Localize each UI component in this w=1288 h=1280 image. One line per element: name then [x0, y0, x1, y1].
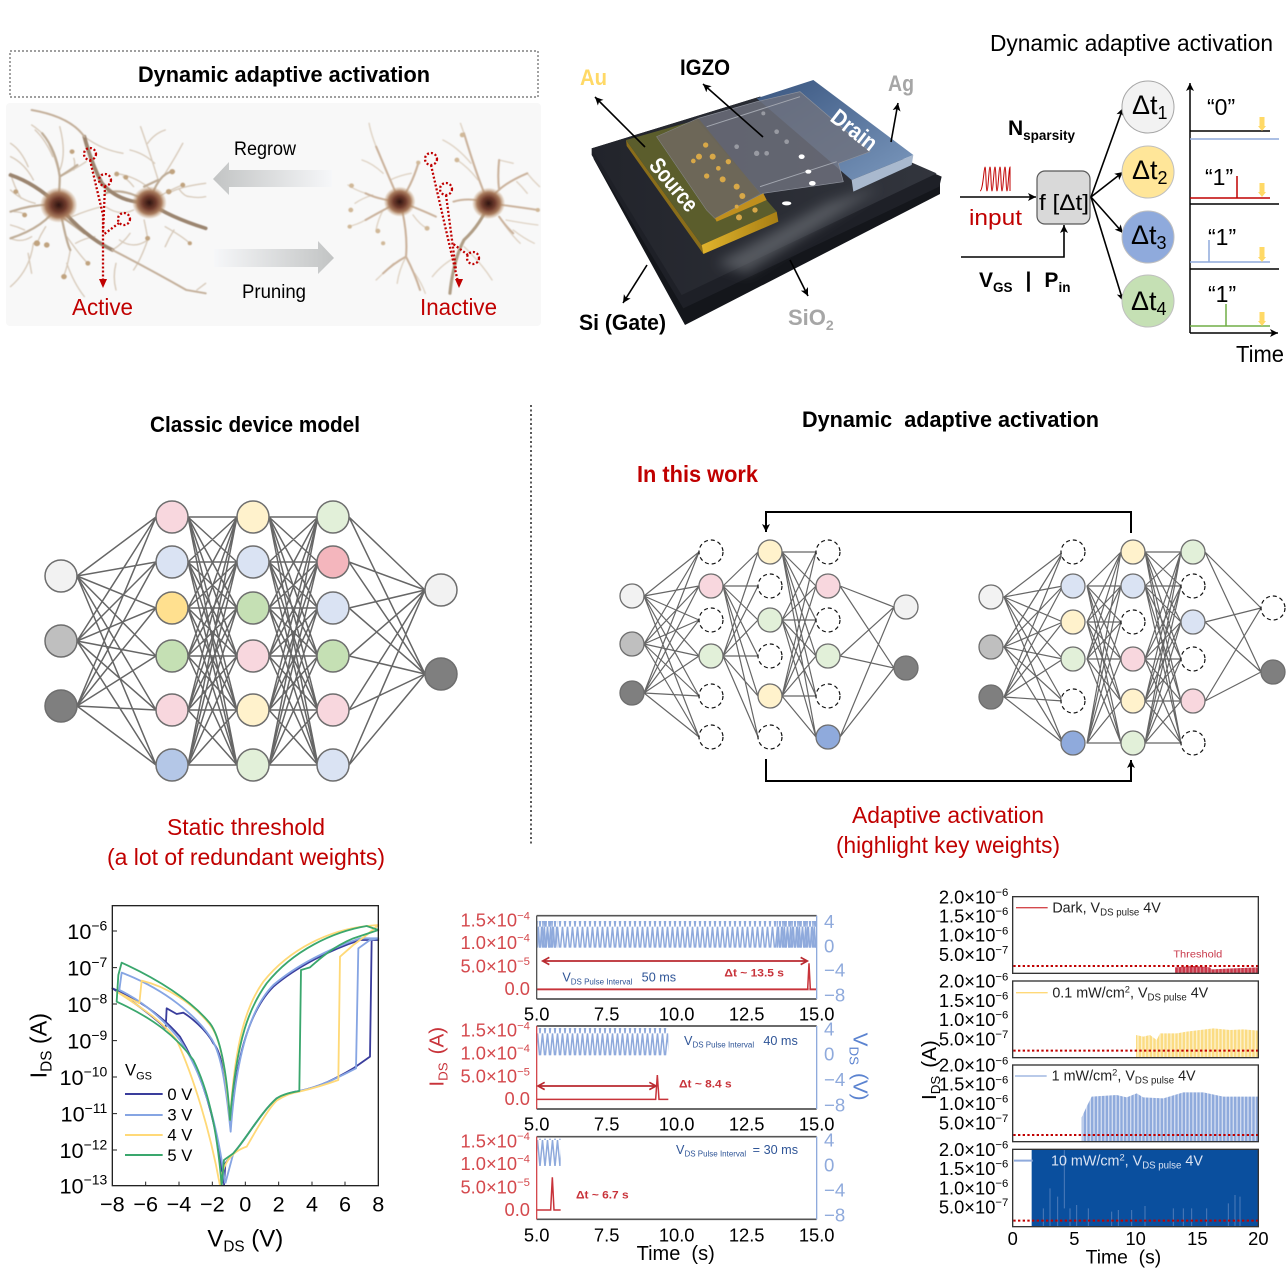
panel: 40 ms interval: 1.5×10: [460, 1020, 517, 1041]
panel: dark: Dark, V: [1052, 900, 1100, 916]
title box: Dynamic adaptive activation: Dynamic adaptive activation: [138, 62, 430, 87]
illustration: active neurons: [11, 110, 206, 297]
arrow: input: [960, 196, 1036, 198]
y tick labels: −6: [91, 917, 108, 933]
label: 1 first: “1”: [1205, 164, 1233, 190]
panel: 50 ms interval: 10.0: [659, 1004, 695, 1025]
panel: 50 ms interval: 0.0: [505, 978, 530, 999]
panel: 30 ms interval: −5: [517, 1177, 530, 1189]
panel: 30 ms interval: [460, 1129, 845, 1245]
label: VGS and Pin: V: [979, 269, 993, 292]
panel: 40 ms interval: −8: [824, 1094, 845, 1115]
panel: 0.1 mW/cm2: −6: [995, 1010, 1008, 1022]
panel: 40 ms interval: 10.0: [659, 1114, 695, 1135]
schematic: dynamic adaptive activation: [960, 30, 1284, 367]
panel: 10 mW/cm2: 1.0×10: [939, 1177, 995, 1198]
label: 0: “0”: [1207, 94, 1235, 120]
panel: 40 ms interval: 15.0: [799, 1114, 834, 1135]
label: IGZO: IGZO: [680, 55, 730, 80]
x axis title: (V): [245, 1226, 283, 1253]
panel: 50 ms interval: 15.0: [799, 1004, 834, 1025]
panel: 40 ms interval: 40 ms: [763, 1034, 798, 1048]
panel: dark: 5.0×10: [939, 944, 995, 965]
panel: 50 ms interval: [460, 910, 845, 1025]
node: Δt3: Δt: [1131, 220, 1157, 250]
label: VGS and Pin: |: [1026, 269, 1031, 292]
panel: 50 ms interval: −5: [517, 956, 530, 968]
legend: 4 V: [167, 1126, 193, 1145]
x tick labels: 15: [1187, 1228, 1208, 1249]
panel: 30 ms interval: 1.0×10: [460, 1153, 517, 1174]
panel: 10 mW/cm2: 2.0×10: [939, 1139, 995, 1160]
chart: pulse response timing: [425, 910, 871, 1265]
network: adaptive, second state: [979, 540, 1285, 755]
y tick labels: 10: [67, 1029, 91, 1054]
panel: 50 ms interval: −4: [517, 910, 530, 922]
x tick labels: 8: [372, 1192, 384, 1217]
label: Ag: Ag: [888, 71, 914, 96]
y tick labels: 10: [60, 1138, 84, 1163]
network: classic model: [45, 501, 457, 781]
panel: 1 mW/cm2: −6: [995, 1074, 1008, 1086]
y tick labels: 10: [60, 1065, 84, 1090]
panel: 30 ms interval: −4: [517, 1154, 530, 1166]
panel: 30 ms interval: DS Pulse Interval: [684, 1150, 746, 1159]
panel: 40 ms interval: 0.0: [505, 1088, 530, 1109]
x tick labels: 10: [1125, 1228, 1146, 1249]
panel: 30 ms interval: −8: [824, 1205, 845, 1226]
panel: 50 ms interval: −4: [517, 933, 530, 945]
legend: GS: [136, 1071, 152, 1083]
panel: 0.1 mW/cm2: [939, 971, 1258, 1058]
title box: Dynamic adaptive activation: [10, 51, 538, 97]
y tick labels: −8: [91, 990, 108, 1006]
panel: 40 ms interval: 0: [824, 1044, 834, 1065]
panel: 30 ms interval: = 30 ms: [753, 1143, 798, 1157]
function box: [1037, 171, 1090, 224]
panel: 0.1 mW/cm2: 1.0×10: [939, 1009, 995, 1030]
y tick labels: 10: [60, 1173, 84, 1198]
panel: 1 mW/cm2: 5.0×10: [939, 1112, 995, 1133]
panel: 40 ms interval: −5: [517, 1066, 530, 1078]
panel: 1 mW/cm2: 1.5×10: [939, 1074, 995, 1095]
panel: 40 ms interval: Δt ~ 8.4 s: [679, 1079, 732, 1091]
axis title: time: Time (s): [637, 1243, 715, 1265]
panel: 40 ms interval: 12.5: [729, 1114, 764, 1135]
axis title: VDS: DS: [846, 1046, 861, 1065]
y axis title: DS: [38, 1051, 55, 1072]
label: 1 third: “1”: [1208, 281, 1236, 307]
y tick labels: 10: [67, 919, 91, 944]
arrow: active trace end: [99, 279, 107, 288]
caption: adaptive activation: Adaptive activation: [852, 802, 1044, 828]
panel: 10 mW/cm2: −6: [995, 1159, 1008, 1171]
x axis title: DS: [223, 1238, 245, 1255]
x tick labels: 5: [1069, 1228, 1079, 1249]
y tick labels: 10: [67, 992, 91, 1017]
node: Δt1: [1122, 81, 1174, 133]
node: Δt2: 2: [1158, 168, 1168, 188]
node: Δt4: Δt: [1131, 286, 1157, 316]
y tick labels: −12: [84, 1136, 108, 1152]
arrow: feedback top: [766, 512, 1131, 533]
readout markers: [1258, 117, 1266, 326]
panel: 40 ms interval: 1.0×10: [460, 1042, 517, 1063]
label: time: Time: [1236, 341, 1284, 367]
legend: 5 V: [167, 1146, 193, 1165]
axis title: IDS: DS: [928, 1076, 943, 1094]
panel: 50 ms interval: 50 ms: [642, 971, 676, 985]
panel: 10 mW/cm2: 1.5×10: [939, 1158, 995, 1179]
heading: Dynamic adaptive activation: [990, 30, 1273, 56]
axis title: IDS: DS: [435, 1062, 450, 1081]
y tick labels: [60, 917, 108, 1198]
panel: 1 mW/cm2: 1 mW/cm: [1052, 1069, 1112, 1085]
x tick labels: 20: [1248, 1228, 1269, 1249]
panel: 50 ms interval: 7.5: [594, 1004, 619, 1025]
label: source: Source: [644, 153, 704, 217]
node: Δt4: [1122, 275, 1174, 327]
axis title: time: Time (s): [1086, 1247, 1161, 1268]
y tick labels: −13: [84, 1172, 108, 1188]
label: inactive: Inactive: [420, 294, 497, 320]
arrow: feedback bottom: [766, 759, 1131, 781]
arrow: inactive trace end: [455, 279, 463, 288]
node: Δt3: 3: [1157, 233, 1167, 253]
y tick labels: −7: [91, 954, 108, 970]
label: 1 second: “1”: [1208, 224, 1236, 250]
panel: 0.1 mW/cm2: −6: [995, 991, 1008, 1003]
panel: 50 ms interval: DS Pulse Interval: [571, 977, 633, 986]
label: input: input: [969, 205, 1022, 230]
label: in this work: In this work: [637, 461, 758, 487]
output traces: [1190, 139, 1279, 326]
panel: 30 ms interval: −4: [517, 1131, 530, 1143]
axis title: IDS: I: [918, 1094, 941, 1100]
label: regrow: Regrow: [234, 139, 296, 160]
panel: 40 ms interval: 5.0: [524, 1114, 549, 1135]
label: Si gate: Si (Gate): [579, 310, 666, 335]
axis title: VDS: V: [848, 1033, 871, 1046]
node: Δt3: [1122, 211, 1174, 263]
node: Δt4: 4: [1157, 299, 1167, 319]
panel: 50 ms interval: 1.0×10: [460, 932, 517, 953]
node: Δt2: [1122, 146, 1174, 198]
device illustration: IGZO transistor: [579, 55, 942, 335]
panel: 50 ms interval: 1.5×10: [460, 910, 517, 931]
panel: 50 ms interval: 5.0×10: [460, 955, 517, 976]
arrow: gate: [961, 225, 1064, 257]
network: adaptive, first state: [620, 540, 918, 749]
panel: dark: −6: [995, 906, 1008, 918]
caption: highlight key weights: (highlight key weights): [836, 832, 1060, 858]
panel: 0.1 mW/cm2: 0.1 mW/cm: [1052, 985, 1125, 1001]
x tick labels: 6: [339, 1192, 351, 1217]
panel: 30 ms interval: 1.5×10: [460, 1130, 517, 1151]
label: VGS and Pin: in: [1058, 280, 1070, 295]
panel: 30 ms interval: 0: [824, 1154, 834, 1175]
node: Δt2: Δt: [1132, 155, 1158, 185]
panel: 40 ms interval: −4: [517, 1020, 530, 1032]
panel: 1 mW/cm2: −6: [995, 1055, 1008, 1067]
panel: 30 ms interval: V: [676, 1143, 684, 1157]
panel: 50 ms interval: 5.0: [524, 1004, 549, 1025]
chart: IDS vs VDS log plot: [26, 906, 384, 1255]
x tick labels: 2: [273, 1192, 285, 1217]
panel: 50 ms interval: 0: [824, 935, 834, 956]
y tick labels: 10: [61, 1102, 85, 1127]
x tick labels: 4: [306, 1192, 318, 1217]
panel: 1 mW/cm2: DS pulse: [1135, 1076, 1174, 1087]
label: N sparsity: N: [1008, 117, 1023, 140]
x tick labels: −4: [167, 1192, 191, 1217]
panel: 30 ms interval: 10.0: [659, 1224, 695, 1245]
red dotted traces, inactive: [425, 153, 479, 282]
panel: 30 ms interval: 12.5: [729, 1224, 764, 1245]
y axis title: (A): [26, 1013, 52, 1051]
panel: 50 ms interval: V: [562, 971, 571, 985]
panel: 1 mW/cm2: 4V: [1178, 1069, 1196, 1085]
node: Δt1: 1: [1158, 103, 1168, 123]
panel: 40 ms interval: [460, 1018, 845, 1135]
axis title: VDS: (V): [848, 1073, 871, 1101]
panel: 0.1 mW/cm2: 4V: [1191, 985, 1209, 1001]
panel: 50 ms interval: Δt ~ 13.5 s: [724, 968, 784, 980]
caption: static threshold: Static threshold: [167, 814, 325, 840]
axis title: IDS: I: [425, 1081, 448, 1087]
x tick labels: −8: [100, 1192, 125, 1217]
panel: 1 mW/cm2: −7: [995, 1113, 1008, 1125]
y axis title: I: [26, 1072, 52, 1078]
panel: dark: 1.5×10: [939, 905, 995, 926]
panel: 40 ms interval: V: [684, 1034, 692, 1048]
panel: 1 mW/cm2: , V: [1117, 1069, 1135, 1085]
arrow: pruning: [214, 241, 334, 274]
x tick labels: −6: [133, 1192, 158, 1217]
panel: 40 ms interval: 7.5: [594, 1114, 619, 1135]
panel: 30 ms interval: 7.5: [594, 1224, 619, 1245]
panel: 10 mW/cm2: −6: [995, 1140, 1008, 1152]
caption: redundant weights: (a lot of redundant weights): [107, 844, 385, 870]
legend: 0 V: [167, 1085, 193, 1104]
panel: dark: DS pulse: [1100, 907, 1139, 918]
panel: 50 ms interval: 4: [824, 911, 834, 932]
panel: dark: −6: [995, 887, 1008, 899]
label: SiO2: SiO: [788, 305, 826, 330]
panel: dark: 1.0×10: [939, 925, 995, 946]
chart: threshold responses under illumination: [918, 886, 1269, 1268]
panel: dark: [939, 886, 1258, 973]
panel: 1 mW/cm2: [939, 1055, 1258, 1142]
legend: V: [125, 1061, 136, 1080]
function box: f [Δt]: [1039, 190, 1089, 215]
panel: 10 mW/cm2: , V: [1125, 1153, 1143, 1169]
panel: 10 mW/cm2: 2: [1119, 1152, 1125, 1162]
panel: 0.1 mW/cm2: −6: [995, 971, 1008, 983]
red dotted traces, active: [84, 148, 130, 282]
x tick labels: [1008, 1228, 1269, 1249]
panel: 40 ms interval: 4: [824, 1018, 834, 1039]
legend: [125, 1061, 193, 1165]
panel: 40 ms interval: 5.0×10: [460, 1066, 517, 1087]
panel: 30 ms interval: −4: [824, 1179, 845, 1200]
panel: 1 mW/cm2: 2.0×10: [939, 1055, 995, 1076]
x tick labels: [100, 1192, 384, 1217]
panel: 10 mW/cm2: 4V: [1185, 1153, 1203, 1169]
x axis title: V: [207, 1226, 223, 1253]
panel: 0.1 mW/cm2: DS pulse: [1148, 992, 1187, 1003]
panel: 0.1 mW/cm2: −7: [995, 1029, 1008, 1041]
y tick labels: 10: [67, 956, 91, 981]
panel: 30 ms interval: Δt ~ 6.7 s: [576, 1189, 629, 1201]
panel: 40 ms interval: DS Pulse Interval: [692, 1041, 754, 1050]
panel: 50 ms interval: −4: [824, 960, 845, 981]
panel: dark: 2.0×10: [939, 886, 995, 907]
label: VGS and Pin: P: [1044, 269, 1058, 292]
panel: dark: −7: [995, 945, 1008, 957]
panel: 10 mW/cm2: [939, 1139, 1258, 1227]
label: Au: Au: [580, 65, 607, 90]
panel: 10 mW/cm2: 5.0×10: [939, 1196, 995, 1217]
panel: 0.1 mW/cm2: , V: [1130, 985, 1148, 1001]
panel: 1 mW/cm2: −6: [995, 1094, 1008, 1106]
y tick labels: −11: [85, 1100, 108, 1116]
panel: 10 mW/cm2: DS pulse: [1142, 1160, 1181, 1171]
panel: 10 mW/cm2: 10 mW/cm: [1051, 1153, 1119, 1169]
heading: classic device model: Classic device model: [150, 412, 360, 437]
curves: [112, 925, 378, 1186]
node: Δt1: Δt: [1132, 90, 1158, 120]
heading: dynamic adaptive activation: Dynamic adaptive activation: [802, 407, 1099, 432]
panel: dark: Threshold: [1173, 949, 1222, 960]
panel: 10 mW/cm2: −7: [995, 1197, 1008, 1209]
panel: dark: −6: [995, 925, 1008, 937]
panel: dark: 4V: [1143, 900, 1161, 916]
panel: 0.1 mW/cm2: 2: [1125, 984, 1130, 994]
axis title: IDS: (A): [918, 1040, 941, 1068]
panel: 1 mW/cm2: 1.0×10: [939, 1093, 995, 1114]
label: active: Active: [72, 294, 133, 320]
panel: 30 ms interval: 5.0×10: [460, 1176, 517, 1197]
panel: 30 ms interval: 15.0: [799, 1224, 834, 1245]
legend: 3 V: [167, 1106, 193, 1125]
panel: 30 ms interval: 4: [824, 1129, 834, 1150]
x tick labels: 0: [1008, 1228, 1018, 1249]
panel: 0.1 mW/cm2: 1.5×10: [939, 990, 995, 1011]
illustration: inactive neurons: [348, 123, 540, 293]
fan-out arrows: [1091, 108, 1123, 301]
panel: 50 ms interval: 12.5: [729, 1004, 764, 1025]
label: VGS and Pin: GS: [993, 280, 1013, 295]
panel: 1 mW/cm2: 2: [1112, 1068, 1117, 1078]
panel: 0.1 mW/cm2: 5.0×10: [939, 1028, 995, 1049]
input pulses: [980, 167, 1010, 191]
panel: neurons active and inactive: [6, 103, 541, 326]
x tick labels: 0: [239, 1192, 251, 1217]
panel: 30 ms interval: 0.0: [505, 1199, 530, 1220]
y tick labels: −9: [91, 1027, 108, 1043]
device leader arrows: [595, 84, 898, 303]
label: pruning: Pruning: [242, 282, 306, 303]
panel: 40 ms interval: −4: [824, 1069, 845, 1090]
panel: 10 mW/cm2: −6: [995, 1178, 1008, 1190]
panel: 0.1 mW/cm2: 2.0×10: [939, 971, 995, 992]
panel: 40 ms interval: −4: [517, 1043, 530, 1055]
y tick labels: −10: [84, 1063, 108, 1079]
arrow: regrow: [213, 162, 332, 195]
label: drain: Drain: [826, 103, 883, 156]
time axes: [1190, 83, 1279, 333]
label: SiO2: 2: [826, 317, 834, 333]
x tick labels: −2: [200, 1192, 225, 1217]
label: N sparsity: sparsity: [1023, 128, 1075, 143]
panel: 50 ms interval: −8: [824, 985, 845, 1006]
axis title: IDS: (A): [425, 1027, 448, 1054]
panel: 30 ms interval: 5.0: [524, 1224, 549, 1245]
